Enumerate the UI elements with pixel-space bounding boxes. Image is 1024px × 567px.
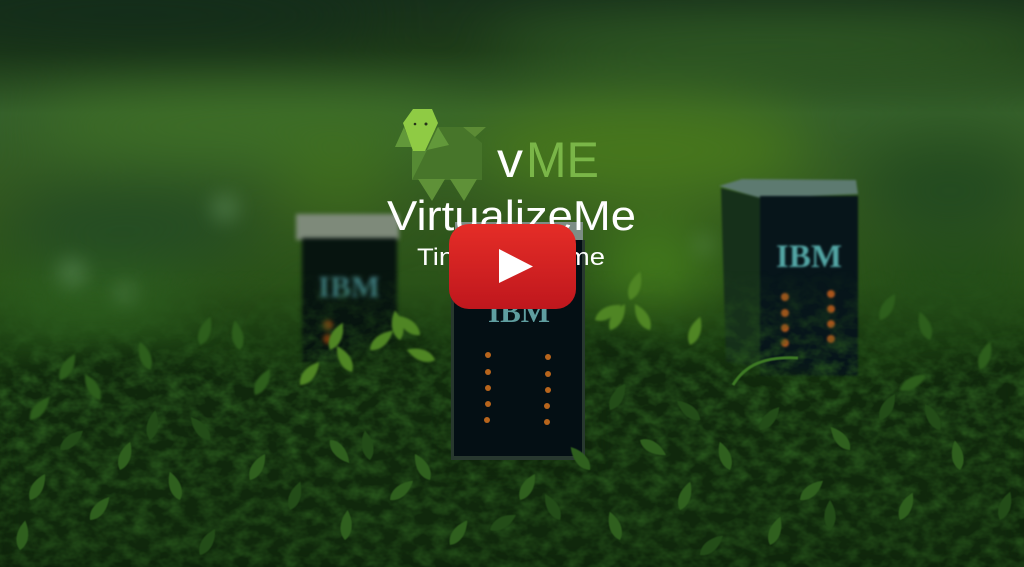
sheep head	[403, 109, 438, 151]
sheep chest facet	[412, 150, 427, 180]
server: right, blurred: IBM	[776, 239, 842, 275]
server: right, blurred	[719, 179, 858, 376]
server: left, blurred	[296, 214, 399, 363]
server: left, blurred: IBM	[318, 269, 380, 304]
title: VirtualizeMe	[387, 192, 636, 239]
play triangle	[499, 249, 533, 283]
sheep left ear	[395, 127, 412, 147]
foliage foreground	[0, 270, 1024, 567]
logo: vME sheep	[395, 109, 486, 201]
sheep right ear	[427, 127, 449, 150]
server: centre	[451, 222, 585, 460]
sheep tail	[463, 127, 486, 137]
sheep legs	[418, 179, 445, 201]
play button	[449, 224, 576, 309]
sheep eyes	[414, 123, 416, 125]
logo wordmark: vME: v	[497, 132, 523, 188]
logo wordmark green: ME	[526, 132, 599, 188]
leaves in front of servers	[14, 358, 1016, 559]
sheep body	[412, 127, 482, 180]
subtitle: Tiny Mainframe	[417, 244, 605, 271]
server: centre: IBM	[488, 294, 550, 329]
